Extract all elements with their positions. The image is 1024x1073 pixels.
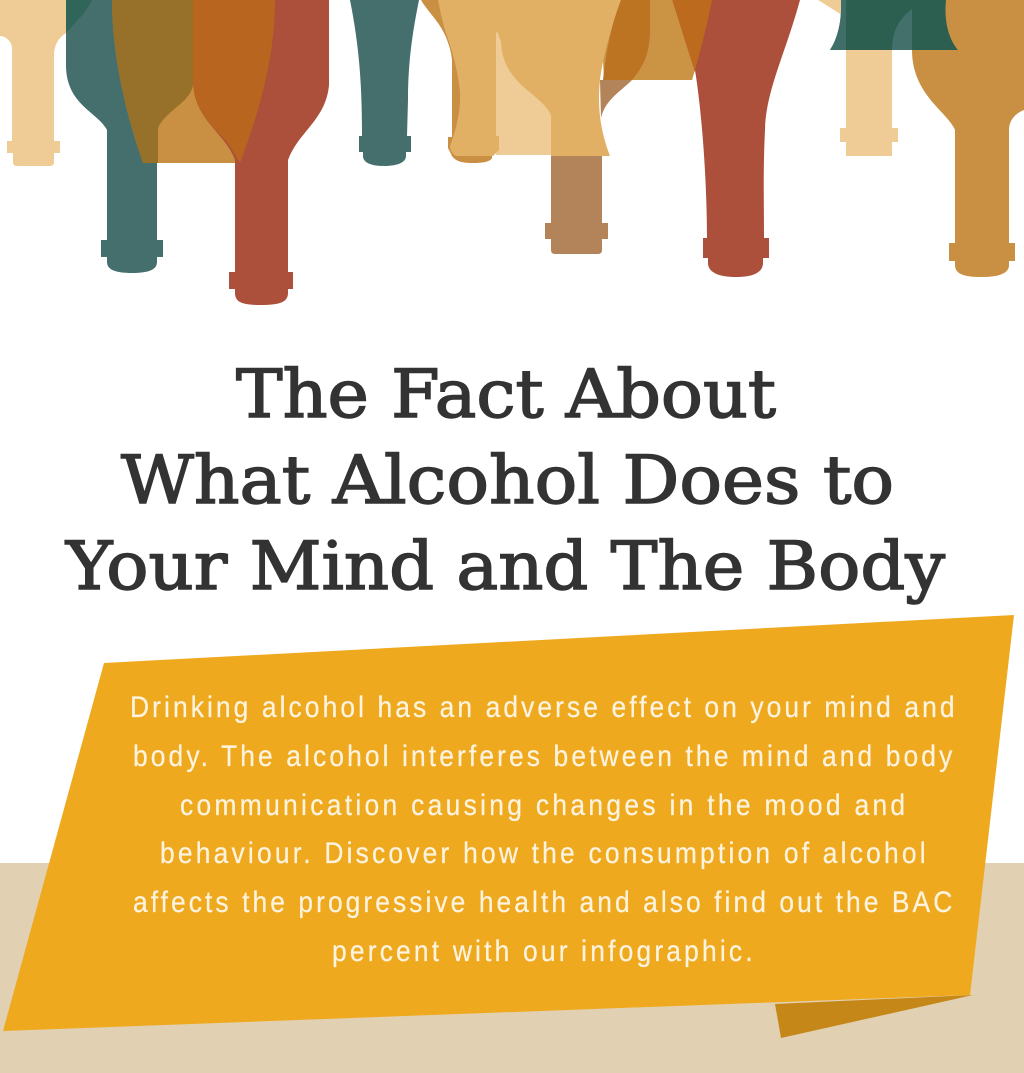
overlap: pale on teal bbox=[66, 0, 92, 33]
title line 1: The Fact About bbox=[236, 356, 776, 433]
paragraph line 1: Drinking alcohol has an adverse effect on your mind and bbox=[130, 689, 955, 723]
title bbox=[65, 356, 946, 605]
bottle: red right bbox=[695, 0, 800, 277]
paragraph line 2: body. The alcohol interferes between the mind and body bbox=[133, 738, 953, 772]
title line 2: What Alcohol Does to bbox=[121, 442, 894, 519]
intro banner bbox=[3, 615, 1014, 1031]
overlap: teal highlight bbox=[892, 9, 912, 50]
bottle: pale centre bbox=[496, 33, 552, 155]
overlap: teal left sliver bbox=[830, 0, 846, 50]
bottle illustration row bbox=[0, 0, 1024, 305]
overlap: orange band bbox=[603, 0, 650, 80]
banner shape bbox=[3, 615, 1014, 1031]
bottle: golden main bbox=[498, 0, 621, 156]
overlap: ochre on teal bbox=[112, 0, 193, 163]
bottle: teal centre bbox=[350, 0, 419, 166]
bottle: ochre upper centre bbox=[600, 0, 695, 80]
bottle: ochre right bbox=[912, 0, 1024, 277]
bottle: golden bottle with lip bbox=[438, 0, 512, 156]
bottle: ochre shadow bottle bbox=[421, 0, 492, 163]
bottle: brown centre neck bbox=[545, 150, 608, 254]
bottle: red left bbox=[193, 0, 329, 305]
ribbon fold bbox=[775, 995, 973, 1038]
paragraph line 5: affects the progressive health and also find out the BAC bbox=[133, 884, 952, 918]
bottle: brown centre shoulder bbox=[600, 80, 632, 118]
paragraph line 6: percent with our infographic. bbox=[332, 933, 753, 967]
overlap: ochre on red bbox=[193, 0, 275, 163]
bottle: pale right bbox=[840, 50, 898, 156]
beige ground band bbox=[0, 863, 1024, 1073]
bottle: dark green cut-off bbox=[830, 0, 958, 50]
title line 3: Your Mind and The Body bbox=[65, 528, 946, 605]
bottle: pale left bbox=[0, 0, 66, 166]
bottle: teal left bbox=[66, 0, 193, 273]
intro paragraph bbox=[130, 689, 955, 967]
paragraph line 4: behaviour. Discover how the consumption of alcohol bbox=[160, 835, 926, 869]
paragraph line 3: communication causing changes in the mood and bbox=[180, 787, 905, 821]
bottle: ochre cut-off bbox=[112, 0, 275, 163]
bottle: pale right corner bbox=[818, 0, 842, 15]
overlap: orange wedge bbox=[672, 0, 714, 72]
